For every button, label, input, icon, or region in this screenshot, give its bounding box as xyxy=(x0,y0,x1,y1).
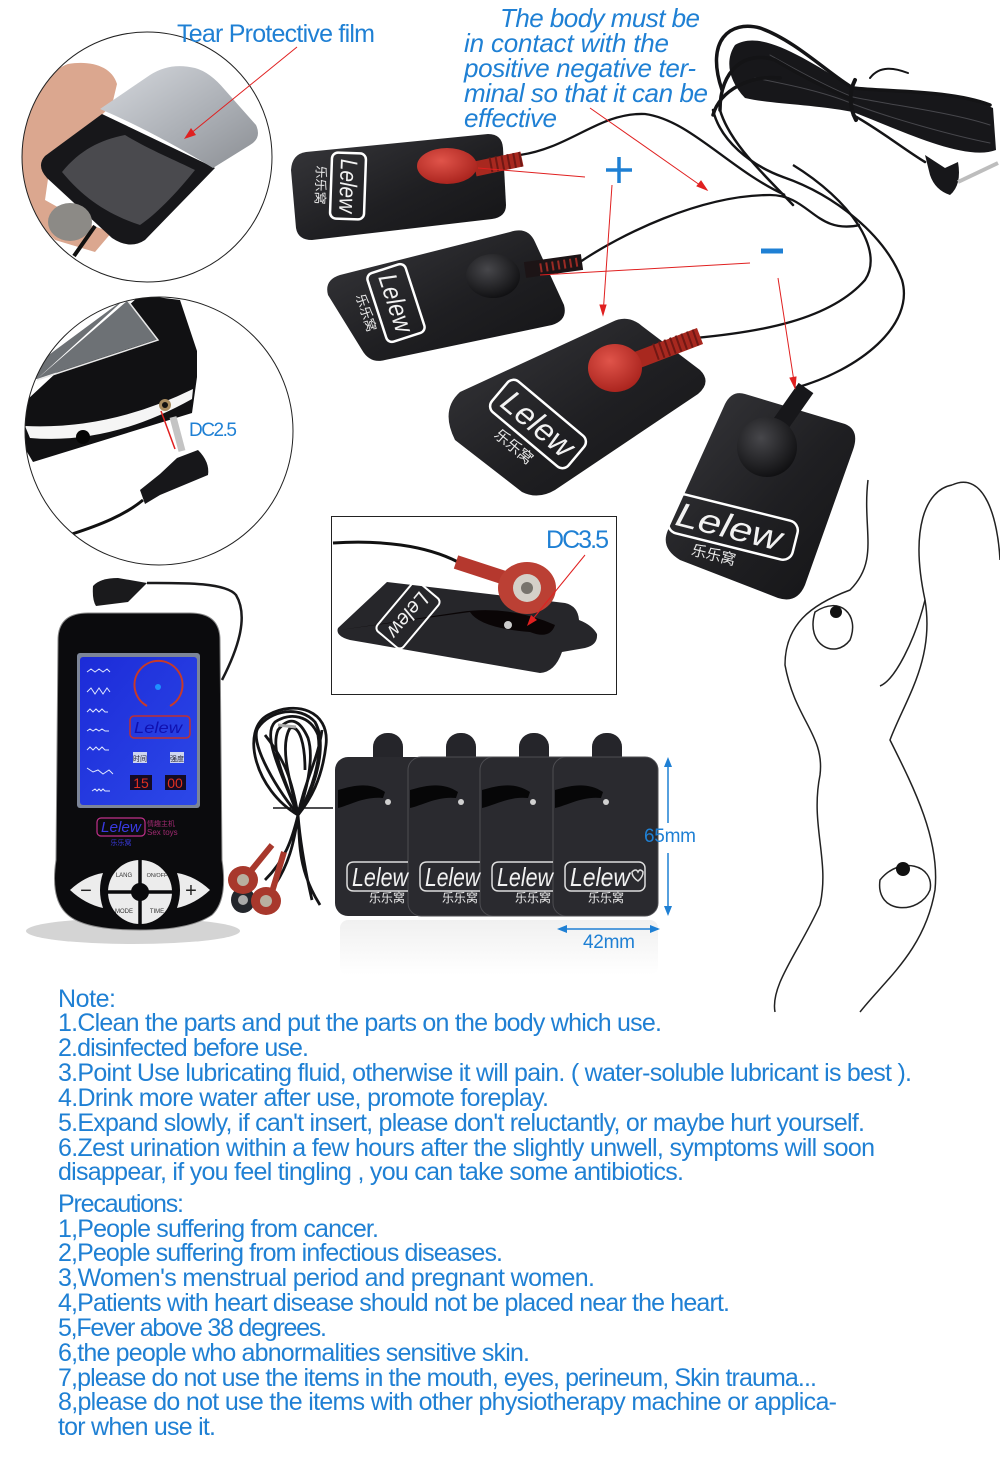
arrow: jack pointer xyxy=(161,411,175,449)
text block: precautions: 2,People suffering from infectious diseases. xyxy=(58,1239,503,1267)
callout: body contact note: The body must be xyxy=(500,3,700,33)
logo: pad 3: 乐乐窝 xyxy=(491,425,537,468)
pad logos: 乐乐窝 xyxy=(442,890,478,905)
text block: precautions: 8,please do not use the items with other physiotherapy machine or applica- xyxy=(58,1388,837,1416)
logo: pad 4 xyxy=(661,492,800,582)
dimension: height 65mm xyxy=(644,757,696,916)
photo: pad logo: Lelew xyxy=(381,587,433,643)
logo: pad 4: 乐乐窝 xyxy=(690,541,738,569)
logo: pad 1: 乐乐窝 xyxy=(312,165,329,205)
pad logos: Lelew xyxy=(497,862,555,892)
screen xyxy=(77,653,200,808)
text block: note: Note: xyxy=(58,985,116,1013)
logo: pad 3 xyxy=(473,377,589,488)
photo: hand holding pad xyxy=(15,63,117,252)
photo: transparent film xyxy=(100,66,258,168)
photo: red snap connector xyxy=(456,562,556,614)
logo: pad 2 xyxy=(348,263,426,349)
logo: pad 3: Lelew xyxy=(494,383,583,466)
logo: pad 1 xyxy=(312,152,366,220)
text block: note xyxy=(58,985,912,1186)
photo: angled plug xyxy=(140,450,208,504)
electrode pad 2 black xyxy=(327,230,582,361)
logo: pad 2: Lelew xyxy=(372,270,420,338)
photo: white stripe xyxy=(25,389,193,439)
callout: body contact note: minal so that it can be xyxy=(464,78,708,108)
text block: precautions: 3,Women's menstrual period and pregnant women. xyxy=(58,1264,595,1292)
text block: precautions: tor when use it. xyxy=(58,1413,216,1441)
arrows: polarity pointers xyxy=(478,108,796,388)
controller device xyxy=(26,578,242,944)
callout: body contact note: effective xyxy=(464,103,557,133)
device logo: Sex toys xyxy=(147,828,178,837)
pad logos xyxy=(347,862,645,905)
text block: precautions: 1,People suffering from cancer. xyxy=(58,1215,379,1243)
screen: Lelew xyxy=(134,720,184,737)
callout: body contact note: in contact with the xyxy=(464,28,669,58)
label: DC2.5: DC2.5 xyxy=(189,420,237,441)
connector: red snap 2 xyxy=(588,336,700,392)
snap: red and black connectors xyxy=(228,845,284,915)
photo: pad surface reflections xyxy=(62,135,195,225)
photo: black pad under film xyxy=(41,114,215,245)
small pads set xyxy=(335,733,658,975)
text block: note: 6.Zest urination within a few hours after the slightly unwell, symptoms will soon xyxy=(58,1134,875,1162)
device logo xyxy=(97,818,178,847)
text block: note: disappear, if you feel tingling , you can take some antibiotics. xyxy=(58,1158,684,1186)
dimension: width 42mm: 42mm xyxy=(583,932,635,953)
connector: black snap 2 xyxy=(737,388,806,477)
device logo: 乐乐窝 xyxy=(110,838,132,847)
panel: DC2.5 jack detail xyxy=(15,295,293,565)
panel: DC3.5 snap detail xyxy=(332,516,616,694)
pad logos: 乐乐窝 xyxy=(369,890,405,905)
photo: snap under pad xyxy=(48,203,92,241)
electrode pad 3 red xyxy=(449,319,706,496)
lead wires xyxy=(520,114,904,388)
cable bundle xyxy=(713,26,996,205)
device buttons: LANG xyxy=(116,873,132,879)
icon: DC plug xyxy=(925,155,998,195)
photo: controller screen xyxy=(36,301,156,380)
pad c xyxy=(480,733,588,916)
photo: metal stud xyxy=(504,621,512,629)
pad logos: 乐乐窝 xyxy=(588,890,624,905)
text block: precautions: 6,the people who abnormalities sensitive skin. xyxy=(58,1339,530,1367)
pad b xyxy=(408,733,516,916)
logo: pad 1: Lelew xyxy=(333,159,362,215)
text block: precautions: Precautions: xyxy=(58,1190,184,1218)
logo: pad 2: 乐乐窝 xyxy=(353,292,379,334)
pad a xyxy=(335,733,443,916)
pad logos: Lelew xyxy=(352,862,410,892)
cable coil with snaps xyxy=(228,708,333,915)
pad logos: Lelew xyxy=(570,862,632,892)
text block: note: 5.Expand slowly, if can't insert, please don't reluctantly, or maybe hurt yourself. xyxy=(58,1109,865,1137)
icon: plus sign xyxy=(606,157,632,183)
reflection xyxy=(340,920,658,975)
icon: chest pad position xyxy=(813,606,853,649)
device buttons: TIME xyxy=(150,909,164,915)
photo: controller body xyxy=(20,295,197,462)
device buttons xyxy=(70,858,210,926)
text block: note: 3.Point Use lubricating fluid, otherwise it will pain. ( water-soluble lubricant is best ). xyxy=(58,1059,912,1087)
dimension: width 42mm xyxy=(557,925,660,953)
connector: red snap 1 xyxy=(417,148,522,184)
electrode pad 4 black xyxy=(661,388,855,599)
icon: minus sign xyxy=(761,248,783,254)
callout: body contact note: positive negative ter- xyxy=(463,53,696,83)
text block: note: 1.Clean the parts and put the parts on the body which use. xyxy=(58,1009,662,1037)
figure: simplified body outline with pad positions xyxy=(774,480,1000,1012)
arrow: film pointer xyxy=(184,47,297,139)
icon: hip pad position xyxy=(880,862,930,908)
device logo: 情趣主机 xyxy=(147,819,175,828)
photo: shiny band xyxy=(340,610,555,635)
label: DC3.5: DC3.5 xyxy=(546,526,609,554)
text block: note: 2.disinfected before use. xyxy=(58,1034,309,1062)
connector: black snap xyxy=(466,254,582,298)
text block: precautions: 4,Patients with heart disease should not be placed near the heart. xyxy=(58,1289,730,1317)
pad logos: Lelew xyxy=(425,862,482,892)
photo: cable xyxy=(333,542,458,562)
photo: jack pin xyxy=(173,417,182,451)
device buttons: − xyxy=(80,880,92,902)
screen: 00 xyxy=(167,775,183,791)
text block: precautions: 7,please do not use the items in the mouth, eyes, perineum, Skin trauma... xyxy=(58,1364,817,1392)
device buttons: ON/OFF xyxy=(147,873,168,879)
text block: precautions xyxy=(58,1190,837,1441)
label: tear protective film: Tear Protective film xyxy=(177,20,375,48)
pad d xyxy=(553,733,658,916)
text block: precautions: 5,Fever above 38 degrees. xyxy=(58,1314,327,1342)
callout: body contact note xyxy=(463,3,708,133)
text block: note: 4.Drink more water after use, promote foreplay. xyxy=(58,1084,549,1112)
electrode pad 1 red xyxy=(291,134,522,240)
device logo: Lelew xyxy=(101,819,142,836)
panel: tear protective film detail xyxy=(15,32,272,282)
logo: pad 4: Lelew xyxy=(672,496,789,559)
photo: pad with tab xyxy=(338,582,597,673)
device buttons: + xyxy=(185,880,197,902)
photo: pad logo xyxy=(374,580,442,650)
screen: 时间 xyxy=(133,754,147,763)
dimension: height 65mm: 65mm xyxy=(644,826,696,847)
device buttons: MODE xyxy=(115,909,133,915)
arrow: DC3.5 pointer xyxy=(527,555,585,626)
screen: 强度 xyxy=(170,754,184,763)
screen: 15 xyxy=(133,775,149,791)
pad logos: 乐乐窝 xyxy=(515,890,551,905)
